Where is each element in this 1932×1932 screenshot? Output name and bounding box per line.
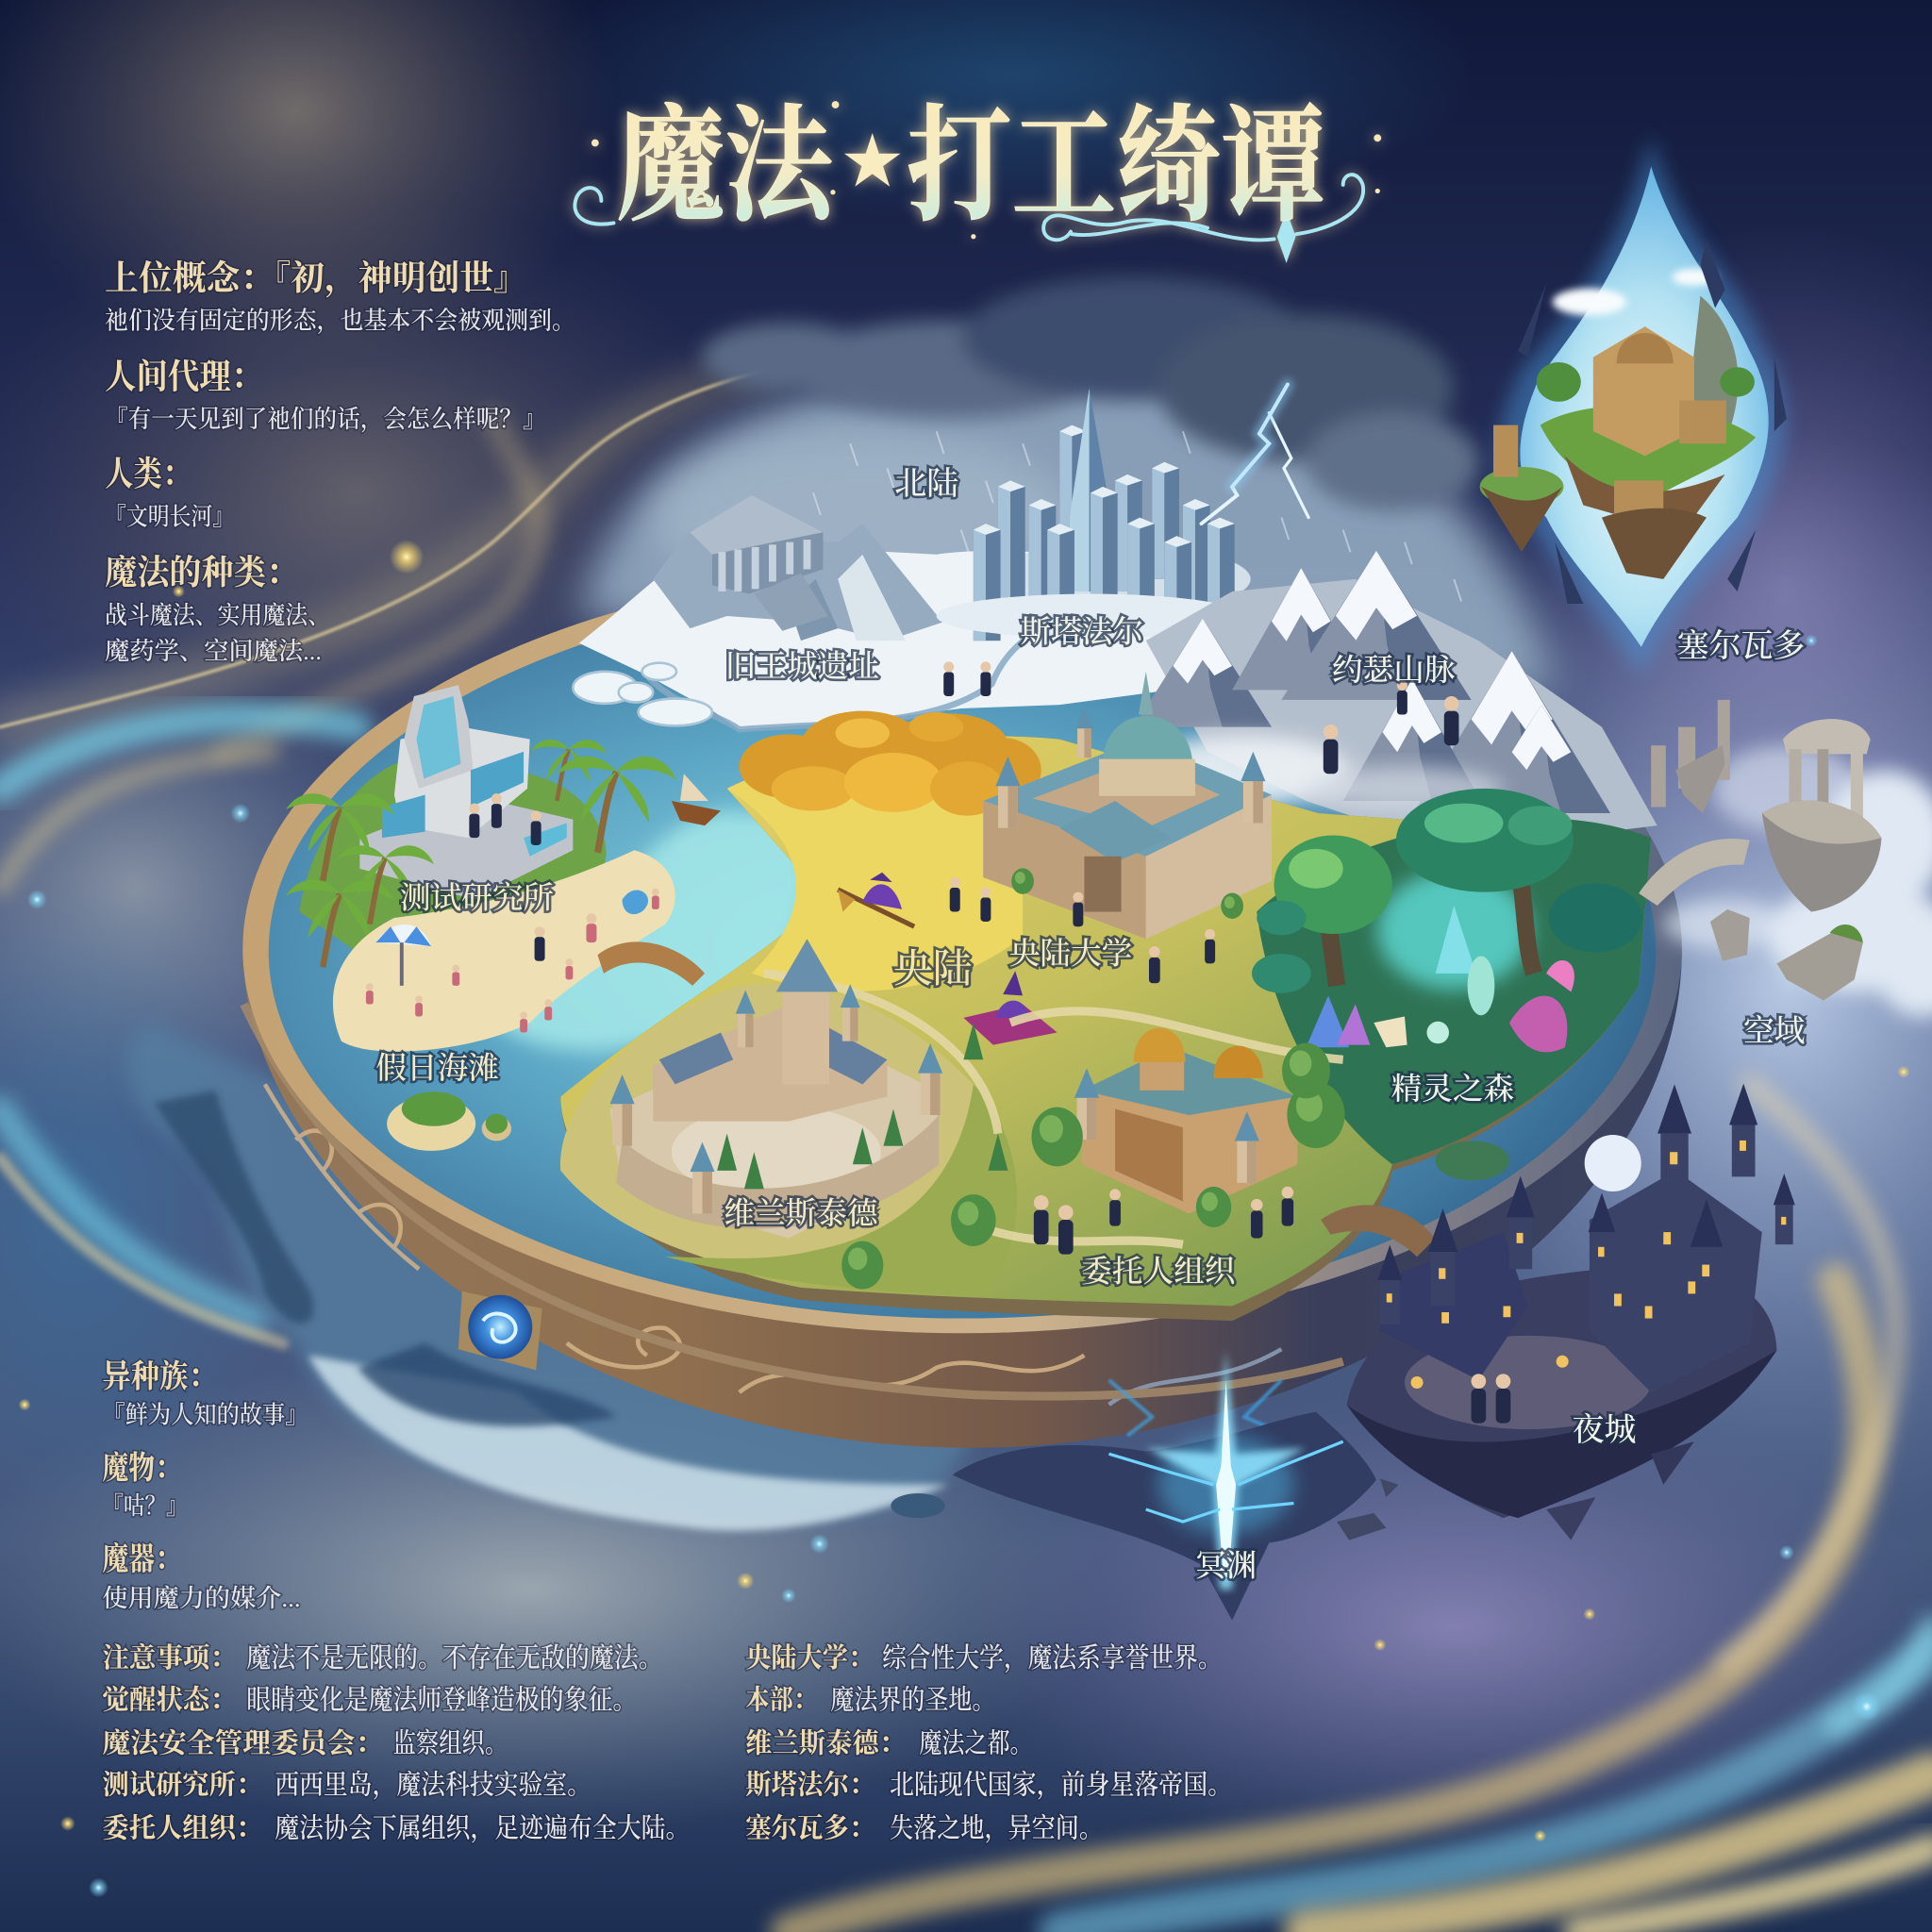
glossary: test lab: 测试研究所： <box>102 1771 262 1801</box>
title sparkles <box>591 101 1381 239</box>
sky ruins clouds <box>1663 745 1932 1017</box>
storm clouds <box>702 277 1478 511</box>
upper left notes <box>105 258 575 665</box>
northern storm mist <box>579 357 1558 690</box>
flying carpet <box>963 971 1058 1045</box>
glossary: awakening <box>102 1685 637 1716</box>
ink cloud under disk <box>127 1023 986 1531</box>
glossary: Stafar: 斯塔法尔： <box>745 1771 874 1801</box>
label: client guild: 委托人组织 <box>1081 1254 1237 1289</box>
note: other races <box>102 1359 308 1429</box>
glossary: safety committee: 魔法安全管理委员会： <box>102 1727 383 1758</box>
glossary: Selvado: 塞尔瓦多： <box>745 1813 874 1843</box>
palms <box>286 740 676 967</box>
glossary column one <box>102 1642 690 1843</box>
title star <box>844 133 901 187</box>
ship <box>672 774 721 825</box>
sparkle stars <box>19 540 1909 1897</box>
Joseph mountains <box>943 551 1657 850</box>
glossary: awakening: 觉醒状态： <box>102 1685 237 1716</box>
glossary: university: 央陆大学： <box>745 1643 874 1674</box>
note: human agent: 人间代理： <box>105 357 262 395</box>
wooden bridge <box>597 941 705 986</box>
note: magic tools <box>102 1541 301 1612</box>
glossary: awakening: 眼睛变化是魔法师登峰造极的象征。 <box>246 1685 637 1716</box>
glossary: test lab <box>102 1771 591 1801</box>
disk rim ornaments <box>244 1004 1343 1405</box>
floating disk world <box>242 385 1682 1448</box>
central continent <box>560 736 1651 1321</box>
title ornament: flourishes <box>575 175 1363 258</box>
sky ruins <box>1639 700 1881 1001</box>
glossary: caution: 魔法不是无限的。不存在无敌的魔法。 <box>246 1643 663 1674</box>
rain streaks <box>752 431 1461 601</box>
note: other races: 异种族： <box>102 1359 217 1395</box>
label: holiday beach: 假日海滩 <box>375 1051 499 1086</box>
label: Velanstead: 维兰斯泰德 <box>724 1196 879 1231</box>
island sky clouds <box>1553 269 1716 315</box>
glossary: client guild: 委托人组织： <box>102 1813 262 1843</box>
autumn woods <box>740 711 1041 816</box>
map labels <box>375 466 1805 1584</box>
label: abyss: 冥渊 <box>1195 1550 1257 1584</box>
note: humans: 人类： <box>105 455 191 493</box>
floating temple <box>1537 326 1756 579</box>
note: monsters: 『咕？』 <box>102 1492 188 1520</box>
note: higher concept <box>105 258 575 335</box>
label: elf forest: 精灵之森 <box>1391 1072 1514 1107</box>
note: monsters <box>102 1450 188 1520</box>
label: sky realm: 空域 <box>1743 1014 1805 1049</box>
Velanstead peninsula <box>560 984 1004 1285</box>
label: central continent: 央陆 <box>893 948 973 991</box>
elf forest <box>1252 789 1651 1180</box>
glossary: Velanstead <box>745 1728 1033 1758</box>
note: magic kinds <box>105 553 330 665</box>
label: night city: 夜城 <box>1573 1412 1637 1448</box>
yellow plain <box>727 751 1023 991</box>
glossary: university: 综合性大学，魔法系享誉世界。 <box>882 1643 1223 1674</box>
old royal ruins <box>653 495 942 641</box>
bridge to night city <box>1321 1205 1436 1257</box>
label: old royal ruins: 旧王城遗址 <box>725 649 879 684</box>
note: human agent <box>105 357 546 433</box>
Velanstead castle <box>610 939 1008 1290</box>
label: Selvado: 塞尔瓦多 <box>1677 628 1805 664</box>
title text: 打工绮谭 <box>907 97 1325 237</box>
note: humans <box>105 455 234 530</box>
note: higher concept: 上位概念：『初，神明创世』 <box>105 258 527 298</box>
central university <box>950 672 1272 983</box>
glossary: caution <box>102 1642 663 1674</box>
glossary: university <box>745 1643 1223 1674</box>
crystal shards <box>1518 241 1787 604</box>
glossary: headquarters <box>745 1686 995 1716</box>
lightning <box>1201 385 1308 524</box>
rune gem <box>458 1291 542 1370</box>
Selvado crystal island <box>1480 136 1787 675</box>
glossary: client guild <box>102 1812 690 1843</box>
glossary: caution: 注意事项： <box>102 1642 237 1674</box>
note: human agent: 『有一天见到了祂们的话，会怎么样呢？』 <box>105 406 546 433</box>
disk rim top <box>242 564 1682 1333</box>
note: magic kinds: 魔药学、空间魔法... <box>105 638 322 665</box>
Stafar city <box>937 388 1251 653</box>
glossary: headquarters: 本部： <box>745 1686 817 1716</box>
glossary: Selvado: 失落之地，异空间。 <box>890 1813 1103 1843</box>
glossary: Stafar <box>745 1770 1232 1801</box>
turquoise shallows <box>492 811 808 1050</box>
note: higher concept: 祂们没有固定的形态，也基本不会被观测到。 <box>105 308 575 335</box>
note: humans: 『文明长河』 <box>105 503 234 530</box>
small island <box>387 1091 511 1151</box>
label: Joseph mountains: 约瑟山脉 <box>1332 653 1456 688</box>
glossary: safety committee: 监察组织。 <box>393 1728 508 1758</box>
holiday beach <box>333 850 675 1052</box>
note: monsters: 魔物： <box>102 1450 181 1486</box>
Guild headquarters <box>1031 1028 1345 1255</box>
title text <box>616 97 1325 237</box>
Test lab <box>299 685 607 961</box>
road paths <box>764 974 1343 1244</box>
disk rim side <box>242 949 1682 1448</box>
label: Stafar: 斯塔法尔 <box>1020 614 1143 649</box>
label: central university: 央陆大学 <box>1009 936 1132 971</box>
note: magic tools: 使用魔力的媒介... <box>102 1585 301 1612</box>
small floating rock <box>1480 425 1563 552</box>
glossary: Velanstead: 维兰斯泰德： <box>745 1728 906 1758</box>
note: magic tools: 魔器： <box>102 1541 181 1577</box>
label: test lab: 测试研究所 <box>400 881 554 916</box>
peninsula grass <box>665 1084 1017 1294</box>
glossary: client guild: 魔法协会下属组织，足迹遍布全大陆。 <box>275 1812 690 1843</box>
northern ice land <box>579 542 1244 729</box>
moon <box>1585 1135 1641 1191</box>
glossary: Selvado <box>745 1813 1103 1843</box>
icebergs <box>573 663 712 725</box>
night castle <box>1377 1084 1795 1392</box>
glossary: Stafar: 北陆现代国家，前身星落帝国。 <box>890 1770 1232 1801</box>
lower left notes <box>102 1359 308 1612</box>
ocean <box>269 584 1656 1319</box>
blue rim cracks <box>1109 1380 1288 1436</box>
witch on broom <box>838 873 914 926</box>
title <box>575 97 1381 258</box>
glossary: headquarters: 魔法界的圣地。 <box>830 1686 995 1716</box>
glossary: Velanstead: 魔法之都。 <box>919 1728 1033 1758</box>
note: magic kinds: 魔法的种类： <box>105 553 298 591</box>
glossary: test lab: 西西里岛，魔法科技实验室。 <box>275 1771 591 1801</box>
note: magic kinds: 战斗魔法、实用魔法、 <box>105 602 330 629</box>
glossary column two <box>745 1643 1232 1843</box>
glossary: safety committee <box>102 1727 508 1758</box>
title text: 魔法 <box>616 97 841 237</box>
night city island <box>1347 1084 1795 1541</box>
label: north continent: 北陆 <box>894 466 958 502</box>
note: other races: 『鲜为人知的故事』 <box>102 1402 308 1429</box>
abyss rock <box>953 1351 1398 1621</box>
